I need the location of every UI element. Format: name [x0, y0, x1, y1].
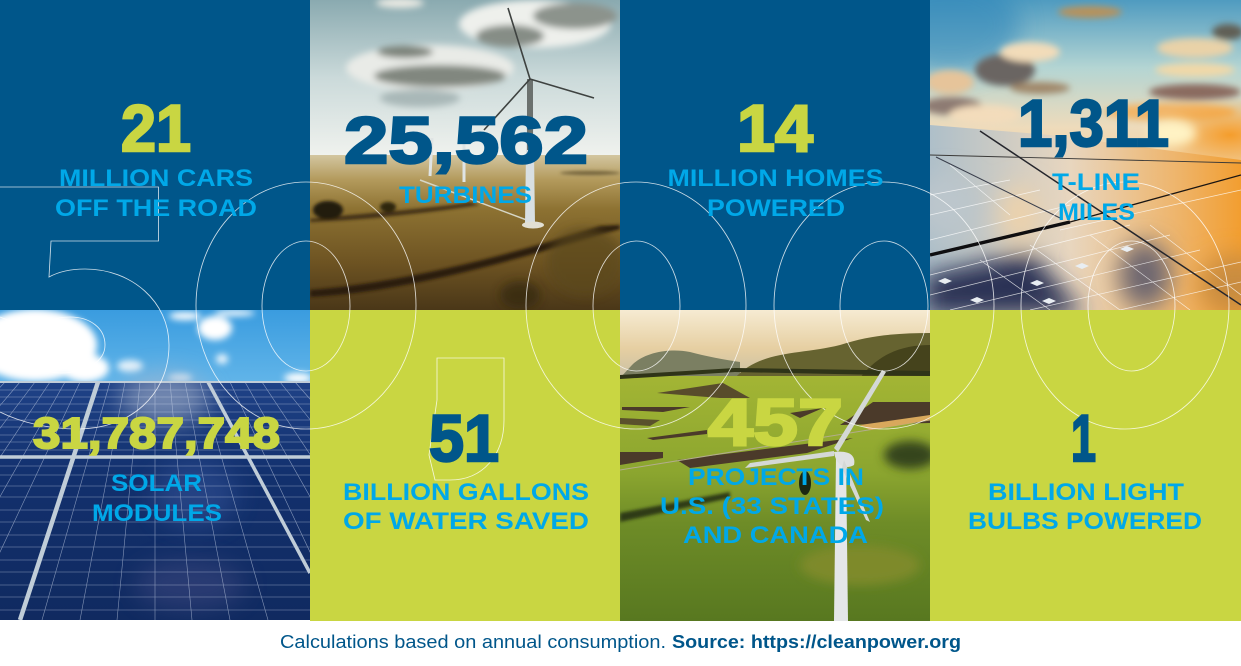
panel: aerial photo of wind turbine over farmland — [620, 310, 930, 621]
panel: lime background, water — [310, 310, 620, 621]
stat: 1,311 T-line miles: 1,311 — [1018, 86, 1169, 160]
stat: 14 million homes powered: 14 — [737, 91, 813, 165]
panel: navy background, cars — [0, 0, 310, 310]
stat: 25,562 turbines — [344, 103, 588, 209]
stat: 21 million cars off the road: 21 — [121, 91, 191, 165]
stat: 1 billion light bulbs powered — [968, 401, 1202, 535]
stat: 31,787,748 solar modules: SOLAR — [111, 470, 202, 497]
stat: 457 projects in U.S. and Canada: U.S. (33 STATES) — [660, 493, 884, 520]
stat: 1,311 T-line miles — [1018, 86, 1169, 226]
stat: 51 billion gallons of water saved — [343, 401, 589, 535]
stat: 457 projects in U.S. and Canada — [660, 385, 884, 549]
stat: 51 billion gallons of water saved: BILLION GALLONS — [343, 479, 589, 506]
stat: 457 projects in U.S. and Canada: 457 — [708, 385, 843, 459]
stat: 25,562 turbines: TURBINES — [399, 182, 532, 209]
stat: 1 billion light bulbs powered: 1 — [1071, 401, 1096, 475]
stat: 25,562 turbines: 25,562 — [344, 103, 588, 177]
stat: 14 million homes powered: MILLION HOMES — [668, 165, 884, 192]
stat: 1 billion light bulbs powered: BULBS POWERED — [968, 508, 1202, 535]
panel: lime background, light bulbs — [930, 310, 1241, 621]
stat: 457 projects in U.S. and Canada: AND CANADA — [683, 522, 868, 549]
stat: 1 billion light bulbs powered: BILLION LIGHT — [988, 479, 1184, 506]
footer source note: Source: https://cleanpower.org — [672, 632, 961, 652]
footer source note — [280, 632, 961, 652]
panel: photo of solar modules under blue sky — [0, 310, 310, 620]
stat: 21 million cars off the road — [55, 91, 257, 222]
stat: 21 million cars off the road: OFF THE ROAD — [55, 195, 257, 222]
stat: 51 billion gallons of water saved: OF WATER SAVED — [343, 508, 589, 535]
stat: 31,787,748 solar modules: MODULES — [92, 500, 222, 527]
stat: 51 billion gallons of water saved: 51 — [429, 401, 499, 475]
footer source note: Calculations based on annual consumption. — [280, 632, 666, 652]
stat: 31,787,748 solar modules — [33, 409, 280, 527]
stat: 14 million homes powered — [668, 91, 884, 222]
stat: 31,787,748 solar modules: 31,787,748 — [33, 409, 280, 458]
stat: 457 projects in U.S. and Canada: PROJECTS IN — [688, 464, 864, 491]
panel: photo of wind turbines in fields — [310, 0, 620, 310]
stat: 21 million cars off the road: MILLION CARS — [59, 165, 253, 192]
stat: 14 million homes powered: POWERED — [707, 195, 845, 222]
panel: photo of solar panels at sunset — [930, 0, 1241, 310]
decorative outlined 500,000 figure — [0, 182, 1229, 480]
panel: navy background, homes — [620, 0, 930, 310]
stat: 1,311 T-line miles: MILES — [1058, 199, 1135, 226]
stat: 1,311 T-line miles: T-LINE — [1052, 169, 1140, 196]
